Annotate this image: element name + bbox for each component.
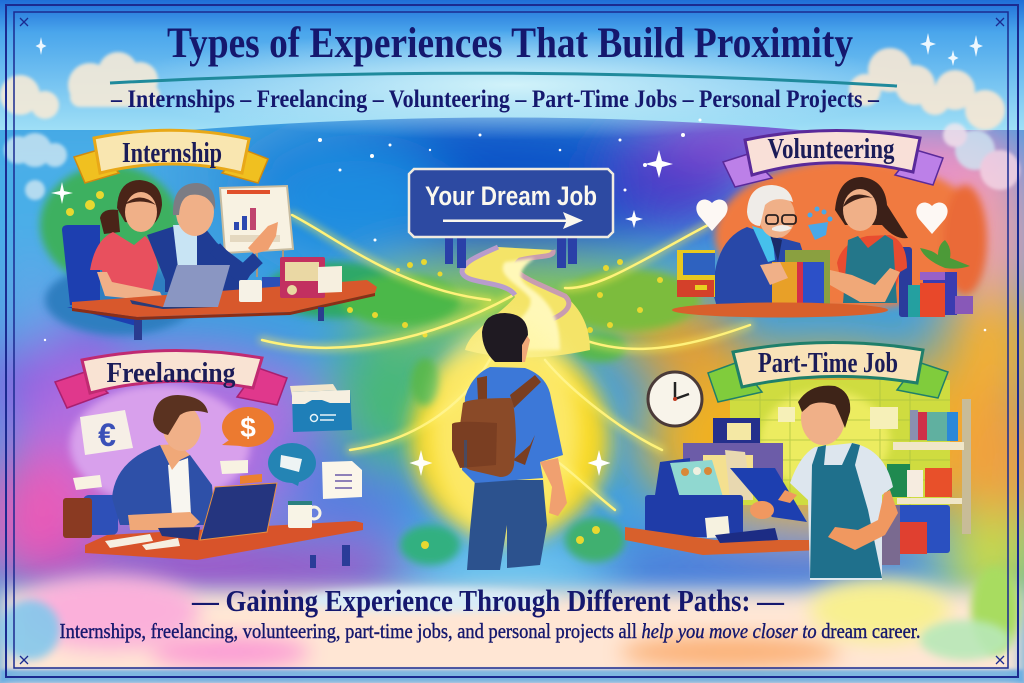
side clouds [4, 123, 1020, 200]
bottom band clouds [0, 566, 1024, 683]
head [482, 313, 530, 362]
plant and books [908, 240, 973, 317]
dollar bubble: $ [240, 412, 256, 443]
star field [36, 33, 986, 476]
mug [239, 280, 262, 302]
man [112, 395, 262, 530]
desk [72, 280, 377, 317]
yellow glow behind traveller [410, 340, 610, 540]
woman [90, 180, 165, 302]
sticky notes [73, 460, 248, 490]
clipboard [730, 468, 807, 522]
shelves [880, 399, 971, 565]
label: Volunteering [768, 134, 894, 165]
euro note: € [98, 417, 116, 453]
backpack straps [477, 375, 541, 465]
folder [290, 384, 352, 432]
euro note [80, 410, 133, 455]
handprint [808, 206, 832, 240]
sign text: Your Dream Job [425, 181, 597, 211]
chair [899, 247, 912, 317]
panel: part-time job [625, 372, 971, 580]
closing sentence: Internships, freelancing, volunteering, part-time jobs, and personal projects all help you move closer to dream career. [60, 619, 920, 643]
top right cloud [849, 48, 1005, 130]
panel: volunteering [672, 177, 973, 318]
backpack body [458, 398, 516, 477]
winding road [462, 247, 590, 358]
desk [672, 302, 888, 318]
backpack pocket [452, 422, 497, 468]
clock [648, 372, 702, 426]
bag and chair [63, 495, 118, 538]
dollar bubble [222, 407, 274, 447]
subtitle list: – Internships – Freelancing – Volunteering – Part-Time Jobs – Personal Projects – [110, 86, 879, 113]
label: Freelancing [106, 357, 236, 389]
title: Types of Experiences That Build Proximity [167, 20, 853, 67]
blue box behind mug [262, 277, 282, 294]
desk [625, 516, 820, 555]
road sign [409, 169, 613, 268]
glowing path lines [262, 215, 750, 510]
laptop [130, 265, 230, 309]
skin arm [540, 458, 567, 516]
older man [713, 185, 806, 307]
mug [288, 501, 320, 528]
green foliage patches [40, 160, 987, 565]
label: Part-Time Job [758, 348, 898, 379]
yellow flower speckles [66, 191, 663, 549]
header sky [0, 0, 1024, 130]
store wall [730, 380, 950, 505]
glow [430, 320, 580, 540]
sign arrow [443, 212, 583, 229]
document [322, 461, 362, 499]
banner: internship [74, 130, 268, 183]
wall notes [778, 407, 898, 429]
banner: part-time job [708, 342, 948, 402]
top left cloud [0, 52, 160, 119]
jeans [467, 480, 547, 570]
woman [830, 177, 908, 303]
cash register [645, 418, 783, 537]
central person with backpack [430, 313, 580, 570]
panel: internship [62, 180, 377, 340]
chart board [220, 186, 293, 277]
desk [85, 521, 363, 568]
teal divider under title [110, 73, 897, 86]
chair [62, 225, 140, 327]
closing heading: — Gaining Experience Through Different Paths: — [191, 583, 785, 618]
panel: freelancing [63, 384, 363, 568]
supply box [677, 250, 715, 297]
label: Internship [122, 138, 222, 169]
banner: volunteering [723, 130, 943, 187]
worker [790, 386, 898, 580]
laptop [158, 483, 277, 540]
binder and note [280, 257, 342, 298]
sign posts [445, 236, 577, 268]
man [147, 183, 278, 292]
hearts [696, 200, 948, 234]
shirt [462, 367, 563, 483]
sign board [409, 169, 613, 237]
books [760, 250, 830, 305]
banner: freelancing [55, 350, 287, 408]
chat bubble [268, 443, 316, 486]
